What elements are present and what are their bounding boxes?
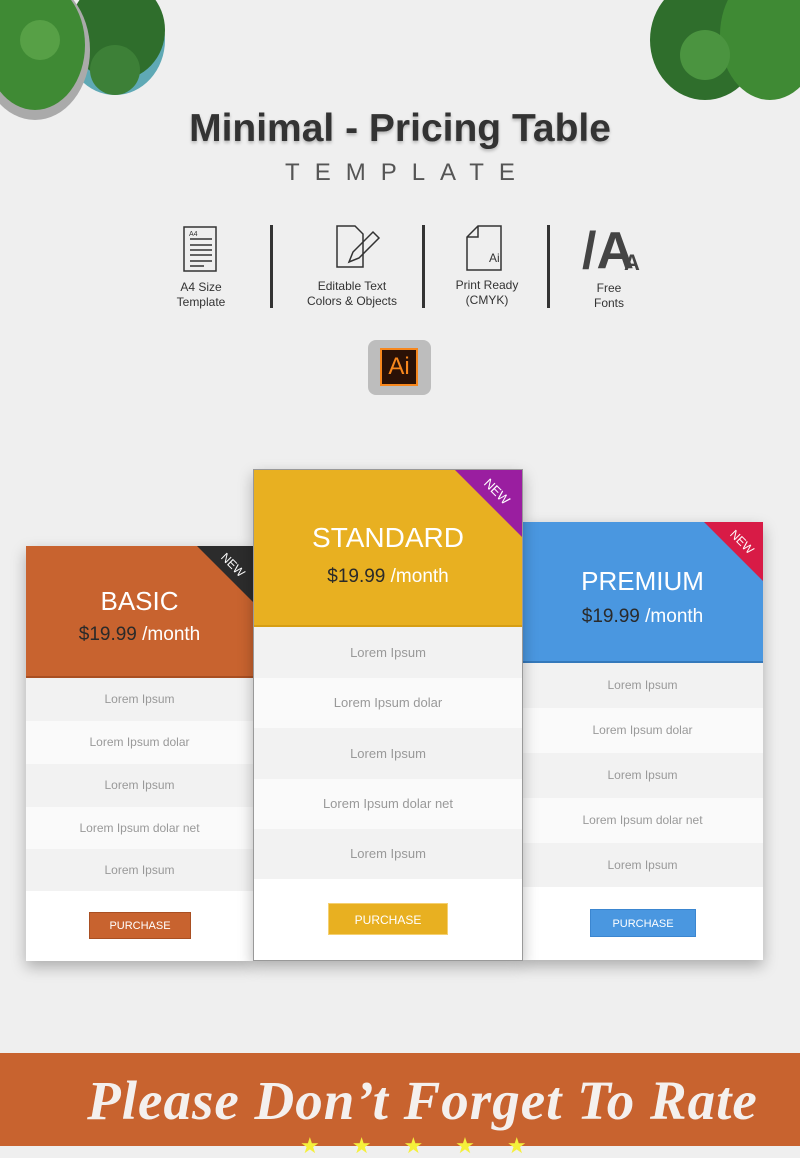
icon: illustrator: [368, 340, 431, 395]
standard header: STANDARD: [312, 522, 464, 553]
label: editable: Editable Text: [318, 279, 386, 293]
plant top-right: [650, 0, 800, 100]
label: A4: [176, 280, 225, 309]
card: basic: [26, 546, 253, 961]
title: Minimal - Pricing Table: [189, 107, 611, 150]
standard rows: [254, 627, 522, 879]
stars: ★★★★★: [300, 1133, 559, 1158]
banner: rate: [0, 1053, 800, 1146]
label: fonts: Fonts: [594, 296, 624, 310]
icon: A4 document: A4: [189, 231, 198, 238]
icon: print AI: Ai: [489, 251, 500, 265]
basic header: [26, 546, 253, 678]
premium rows: Lorem Ipsum: [607, 768, 678, 782]
basic rows: Lorem Ipsum: [104, 863, 175, 877]
basic rows: Lorem Ipsum dolar net: [79, 821, 200, 835]
label: fonts: Free: [597, 281, 621, 295]
basic header: NEW: [218, 550, 248, 580]
label: fonts: [594, 281, 624, 310]
label: editable: Colors & Objects: [307, 294, 397, 308]
premium rows: Lorem Ipsum: [607, 678, 678, 692]
standard button: [328, 903, 448, 935]
label: A4: Template: [177, 295, 225, 309]
basic rows: Lorem Ipsum: [104, 778, 175, 792]
premium header: NEW: [727, 527, 757, 557]
standard rows: Lorem Ipsum dolar net: [323, 796, 453, 811]
standard rows: Lorem Ipsum: [350, 645, 426, 660]
basic rows: Lorem Ipsum dolar: [89, 735, 190, 749]
ribbon: new: [455, 470, 522, 537]
standard header: [254, 470, 522, 627]
premium header: $19.99 /month: [582, 606, 703, 627]
feature icons row: [176, 224, 640, 310]
basic header: BASIC: [100, 586, 179, 616]
premium rows: Lorem Ipsum dolar net: [582, 813, 703, 827]
subtitle: TEMPLATE: [285, 159, 530, 186]
standard rows: Lorem Ipsum: [350, 746, 426, 761]
banner: rate: Please Don’t Forget To Rate: [87, 1070, 758, 1131]
icon: print AI: [466, 225, 502, 271]
premium button: [590, 909, 696, 937]
standard button: PURCHASE: [355, 913, 421, 927]
icon: edit: [336, 225, 380, 268]
icon: A4 document: [183, 226, 217, 272]
ribbon: new: [704, 522, 763, 581]
basic button: PURCHASE: [109, 920, 171, 932]
label: print: [456, 278, 518, 307]
premium header: [522, 522, 763, 663]
basic button: [89, 912, 191, 939]
premium rows: [523, 663, 763, 887]
standard rows: Lorem Ipsum dolar: [334, 695, 442, 710]
label: print: Print Ready: [456, 278, 518, 292]
basic rows: Lorem Ipsum: [104, 692, 175, 706]
basic rows: [26, 678, 253, 891]
basic header: $19.99 /month: [79, 624, 200, 645]
label: A4: A4 Size: [180, 280, 222, 294]
card: standard: [253, 469, 523, 961]
standard header: NEW: [481, 475, 513, 508]
standard rows: Lorem Ipsum: [350, 846, 426, 861]
label: editable: [307, 279, 397, 308]
standard header: $19.99 /month: [327, 566, 449, 587]
label: print: (CMYK): [466, 293, 508, 307]
card: premium: [522, 522, 763, 960]
premium button: PURCHASE: [612, 918, 674, 930]
premium rows: Lorem Ipsum: [607, 858, 678, 872]
ribbon: new: [197, 546, 253, 602]
premium rows: Lorem Ipsum dolar: [592, 723, 693, 737]
icon: illustrator: Ai: [388, 353, 410, 380]
plant top-left: [0, 0, 165, 120]
premium header: PREMIUM: [581, 566, 704, 596]
